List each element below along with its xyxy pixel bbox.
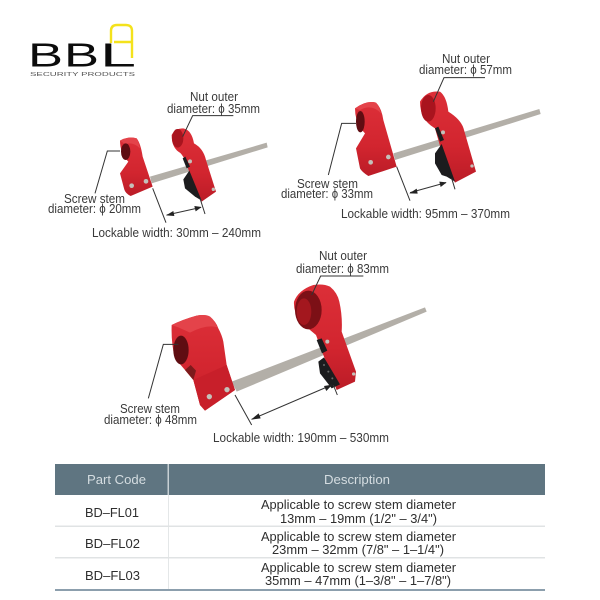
lockable width label: Lockable width: 30mm – 240mm <box>92 226 261 240</box>
logo wordmark: B <box>64 36 99 74</box>
lockable width label: Lockable width: 95mm – 370mm <box>341 207 510 221</box>
nut outer label: diameter: ϕ 35mm <box>167 102 260 116</box>
row: BD-FL02: 23mm – 32mm (7/8" – 1–1/4") <box>272 543 444 557</box>
table header: Description <box>324 472 390 487</box>
device illustration <box>120 128 268 202</box>
screw stem label <box>104 402 197 427</box>
dimension lines <box>95 116 233 223</box>
nut outer label <box>419 52 512 77</box>
row: BD-FL02: BD–FL02 <box>85 537 140 551</box>
row: BD-FL01 <box>85 498 456 526</box>
icon: yellow padlock shackle <box>111 25 132 58</box>
nut outer label: Nut outer <box>190 90 238 104</box>
screw stem label: Screw stem <box>120 402 180 416</box>
product: medium lockout device <box>281 52 541 221</box>
product: small lockout device <box>48 90 268 240</box>
screw stem label <box>48 192 141 216</box>
row: BD-FL03: 35mm – 47mm (1–3/8" – 1–7/8") <box>265 574 451 588</box>
nut outer label: Nut outer <box>442 52 490 66</box>
screw stem label: diameter: ϕ 48mm <box>104 413 197 427</box>
table header <box>55 464 545 495</box>
row: BD-FL01: BD–FL01 <box>85 506 139 520</box>
product: large lockout device <box>104 249 427 445</box>
screw stem label <box>281 177 373 201</box>
logo: BBL Security Products <box>28 25 136 78</box>
nut outer label: diameter: ϕ 83mm <box>296 262 389 276</box>
lockable width label: Lockable width: 190mm – 530mm <box>213 431 389 445</box>
logo wordmark <box>28 36 136 74</box>
logo wordmark: L <box>100 36 136 74</box>
dimension lines <box>148 276 363 425</box>
logo wordmark: B <box>28 36 63 74</box>
nut outer label: Nut outer <box>319 249 367 263</box>
row: BD-FL01: Applicable to screw stem diameter <box>261 498 456 512</box>
nut outer label <box>296 249 389 276</box>
logo tagline: SECURITY PRODUCTS <box>30 72 136 78</box>
device illustration <box>172 284 427 411</box>
part code table <box>55 464 545 591</box>
row: BD-FL02: Applicable to screw stem diameter <box>261 530 456 544</box>
dimension lines <box>328 78 485 201</box>
screw stem label: Screw stem <box>297 177 358 191</box>
screw stem label: Screw stem <box>64 192 125 206</box>
row: BD-FL02 <box>85 530 456 557</box>
row: BD-FL01: 13mm – 19mm (1/2" – 3/4") <box>280 512 437 526</box>
screw stem label: diameter: ϕ 20mm <box>48 202 141 216</box>
table header: Part Code <box>87 472 146 487</box>
device illustration <box>355 91 541 183</box>
row: BD-FL03: Applicable to screw stem diameter <box>261 561 456 575</box>
nut outer label: diameter: ϕ 57mm <box>419 63 512 77</box>
screw stem label: diameter: ϕ 33mm <box>281 187 373 201</box>
row: BD-FL03 <box>85 561 456 588</box>
nut outer label <box>167 90 260 116</box>
row: BD-FL03: BD–FL03 <box>85 569 140 583</box>
